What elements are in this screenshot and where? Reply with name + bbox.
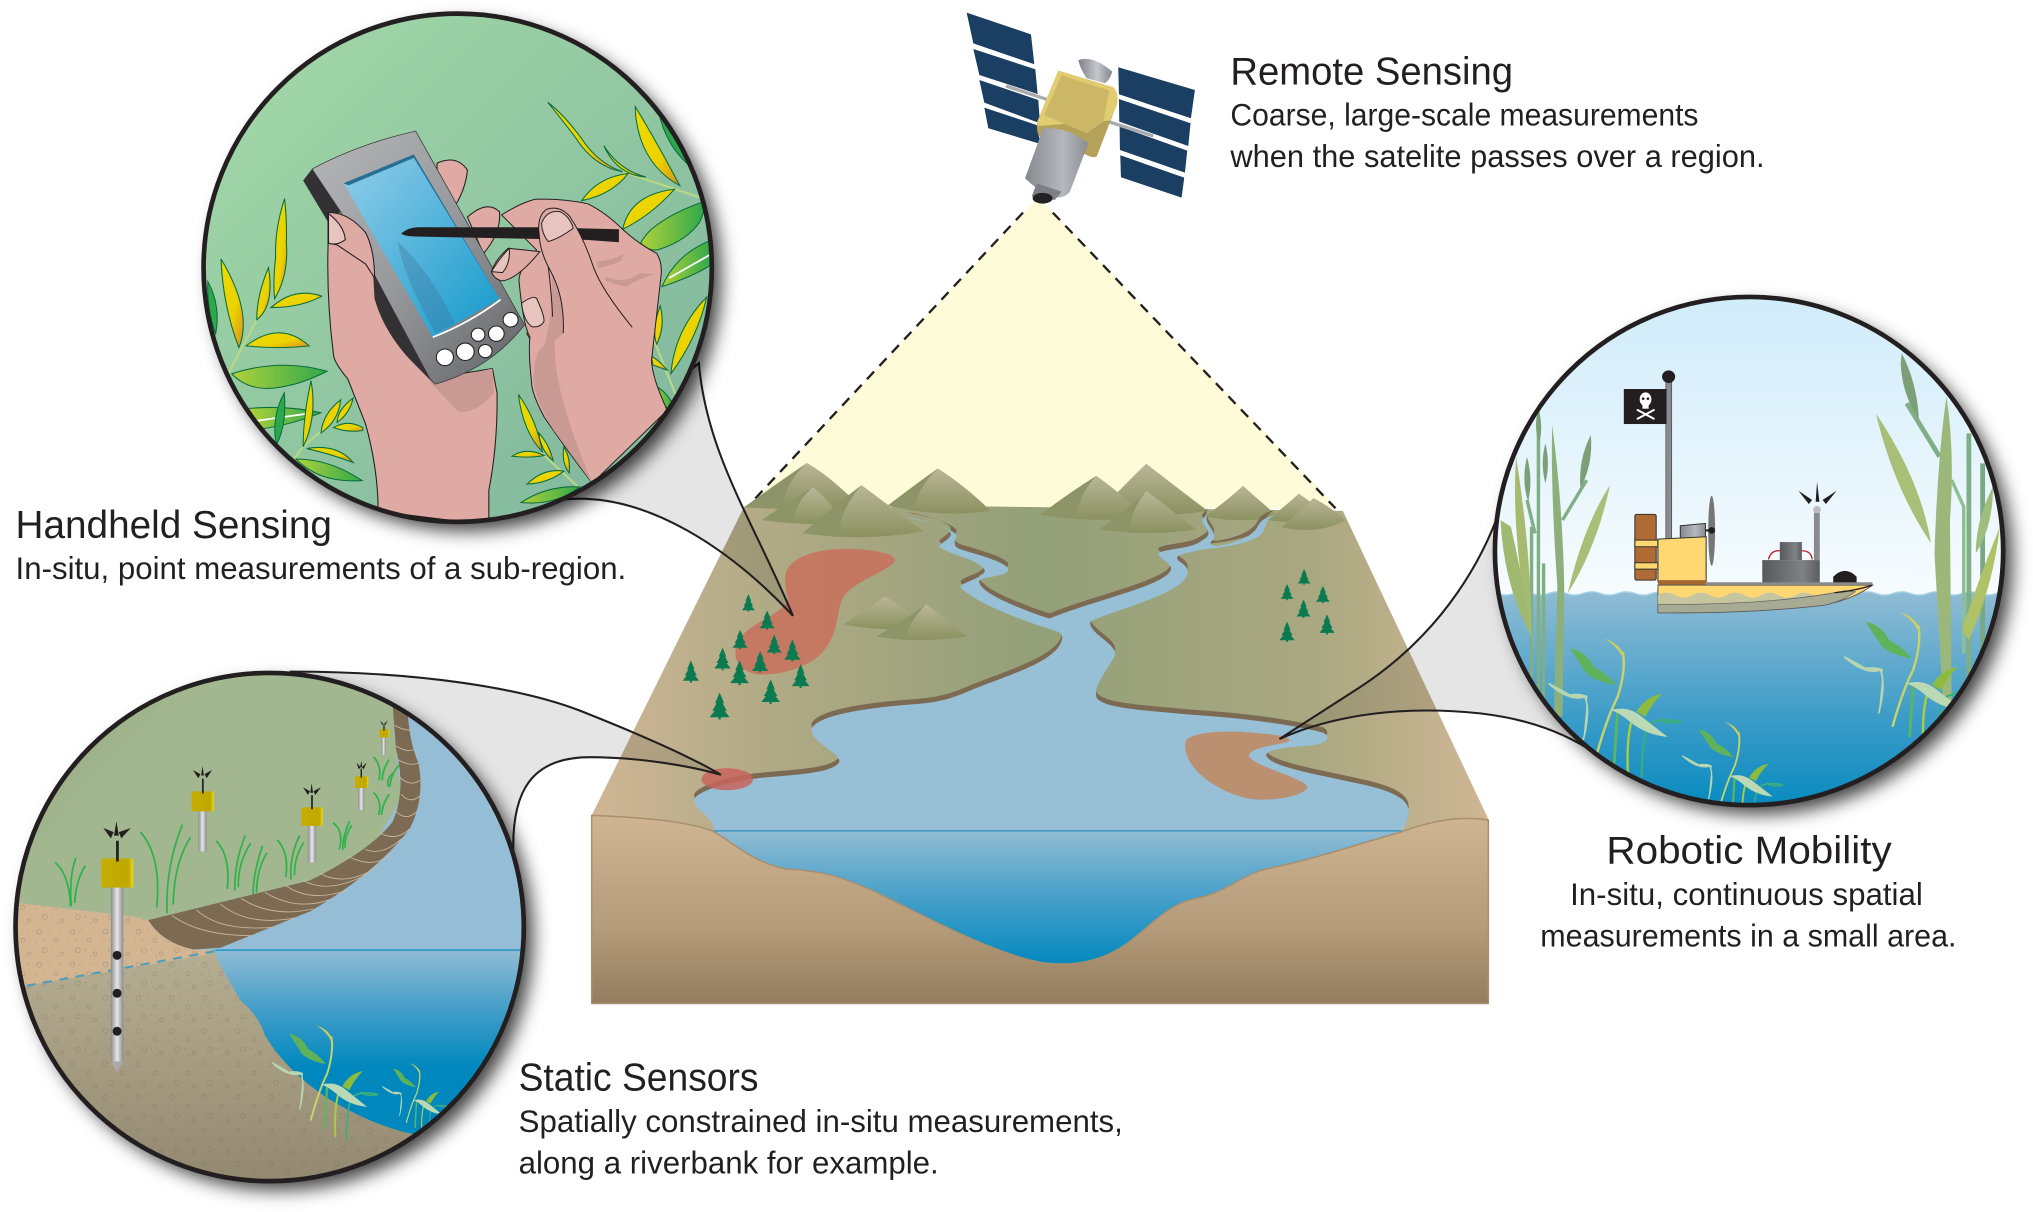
waterline: [215, 948, 537, 953]
bow line: [1835, 585, 1872, 593]
underwater plants right: [1844, 612, 1977, 750]
trees right: [1279, 569, 1335, 642]
grass: [55, 757, 399, 913]
engine: [1680, 523, 1705, 538]
thumb nail: [542, 211, 573, 242]
reeds left: [1501, 408, 1610, 717]
robotic mobility region: [1185, 732, 1308, 800]
gray soil: [0, 951, 448, 1212]
index finger: [492, 248, 540, 281]
thumb: [539, 208, 600, 333]
screen inset: [344, 154, 500, 299]
heading: handheld sensing: Handheld Sensing: [16, 504, 332, 547]
aquatic plants left: [272, 1025, 378, 1140]
lens ring: [204, 14, 712, 522]
screen: [344, 154, 500, 337]
cabin: [1658, 537, 1706, 582]
magnifier: robotic mobility: [1480, 287, 2031, 827]
text: remote sensing line 1: Coarse, large-scale measurements: [1230, 97, 1698, 133]
hub cap: [1708, 527, 1715, 534]
heading: remote sensing: Remote Sensing: [1230, 50, 1513, 93]
boat: [1624, 370, 1872, 613]
palm shadow: [430, 368, 494, 412]
sand: [0, 901, 215, 991]
sensor 5: [379, 720, 389, 755]
hull below waterline: [1658, 591, 1852, 613]
dome: [1833, 571, 1857, 582]
cross-section water: [714, 831, 1401, 968]
trees left: [683, 594, 809, 719]
right hand: [401, 199, 667, 483]
sensor housing: [1762, 560, 1820, 582]
handheld sensing region: [735, 549, 895, 675]
buttons: [436, 312, 518, 366]
device body: [312, 131, 525, 384]
heading: static sensors: Static Sensors: [519, 1056, 758, 1099]
sensor 4: [355, 761, 368, 810]
thumb contour: [539, 208, 632, 333]
water: [1480, 592, 2031, 820]
soil stipple: [0, 901, 448, 1212]
magnifier: handheld sensing: [180, 0, 740, 545]
knuckle creases: [597, 254, 655, 287]
hull keel: [1658, 591, 1855, 613]
little finger nail: [527, 327, 546, 347]
straps: [1635, 540, 1658, 569]
scene: [1480, 287, 2031, 827]
left hand: [328, 213, 497, 525]
middle finger nail: [522, 297, 544, 327]
water table: [27, 951, 215, 986]
housing top: [1780, 542, 1802, 560]
aquatic plants right: [382, 1063, 449, 1135]
underwater plants centre: [1682, 722, 1783, 827]
nail: [329, 214, 345, 244]
reeds right: [1876, 353, 2000, 703]
water column: [172, 950, 551, 1067]
cylinder: [1025, 128, 1088, 198]
hub: [1705, 527, 1712, 533]
text: static sensors line 2: along a riverbank for example.: [519, 1144, 939, 1180]
callout cone: robotic: [1279, 473, 1621, 755]
antenna ball: [1813, 506, 1821, 513]
shadow: [25, 682, 533, 1190]
battery box: [1635, 514, 1656, 580]
index nail: [492, 248, 509, 273]
text: robotic mobility line 1: In-situ, continuous spatial: [1570, 876, 1923, 912]
underwater plants: [1549, 638, 1681, 777]
sky water: [0, 660, 540, 951]
static sensor region: [701, 768, 753, 790]
shadow: [1504, 306, 2012, 814]
mast: [1666, 382, 1672, 540]
screen edge: [433, 300, 501, 337]
text: handheld sensing: In-situ, point measurements of a sub-region.: [16, 550, 626, 586]
flag: [1624, 389, 1667, 424]
text: robotic mobility line 2: measurements in a small area.: [1540, 917, 1957, 953]
panel arms: [1006, 86, 1153, 136]
body light rim: [1037, 71, 1117, 126]
waterline: [714, 830, 1401, 832]
callout cone: static sensors: [292, 672, 721, 856]
satellite footprint: [747, 197, 1338, 508]
nozzle: [1032, 183, 1062, 200]
thumb over device: [328, 213, 375, 278]
lens: [1033, 193, 1053, 204]
magnifier: static sensors: [0, 660, 551, 1212]
river bank shadow: [694, 508, 1409, 826]
grass land: [0, 660, 401, 920]
fingers behind device: [437, 160, 500, 254]
foothills: [844, 597, 967, 640]
background: [206, 16, 710, 518]
deck: [1706, 580, 1872, 587]
deep water: [172, 1067, 551, 1212]
footprint dashed edges: [755, 213, 1335, 508]
body face: [1044, 75, 1109, 133]
hand body: [502, 199, 667, 483]
wrist shadow: [533, 340, 592, 483]
screen reflection: [398, 241, 455, 334]
land surface: [592, 507, 1488, 847]
left solar panels: [967, 13, 1041, 144]
callout cone: handheld: [567, 363, 793, 616]
hull: [1658, 585, 1872, 613]
dish: [1078, 59, 1112, 83]
text: static sensors line 1: Spatially constrained in-situ measurements,: [519, 1103, 1123, 1139]
leaves: [208, 102, 712, 503]
river: [694, 513, 1409, 831]
scene: [206, 16, 710, 520]
propeller: [1708, 496, 1715, 566]
radio sparks: [1798, 482, 1837, 504]
sensor 3: [301, 783, 323, 862]
lens ring: [1495, 297, 2003, 805]
sky: [1480, 287, 2031, 597]
red handle: [1768, 551, 1812, 559]
body: [1037, 71, 1117, 157]
heading: robotic mobility: Robotic Mobility: [1606, 829, 1892, 872]
lens ring: [16, 673, 524, 1181]
shadow: [213, 23, 721, 531]
device dark side: [303, 169, 434, 384]
right solar panels: [1118, 67, 1195, 198]
mast top: [1662, 370, 1675, 383]
satellite: [967, 13, 1195, 204]
antenna: [1814, 513, 1820, 560]
sensor 2: [191, 766, 214, 851]
palm shadow: [544, 273, 563, 347]
skull and bones: [1638, 392, 1654, 419]
mountains back: [744, 463, 1346, 537]
stylus: [401, 227, 619, 242]
text: remote sensing line 2: when the satelite passes over a region.: [1229, 138, 1765, 174]
bank lines: [172, 725, 420, 936]
cross-section soil: [592, 815, 1488, 1004]
bank face: [148, 704, 421, 949]
deck strip: [1658, 580, 1706, 585]
scene: [0, 660, 551, 1212]
landscape block: [592, 463, 1488, 1004]
big sensor: [101, 821, 133, 1072]
